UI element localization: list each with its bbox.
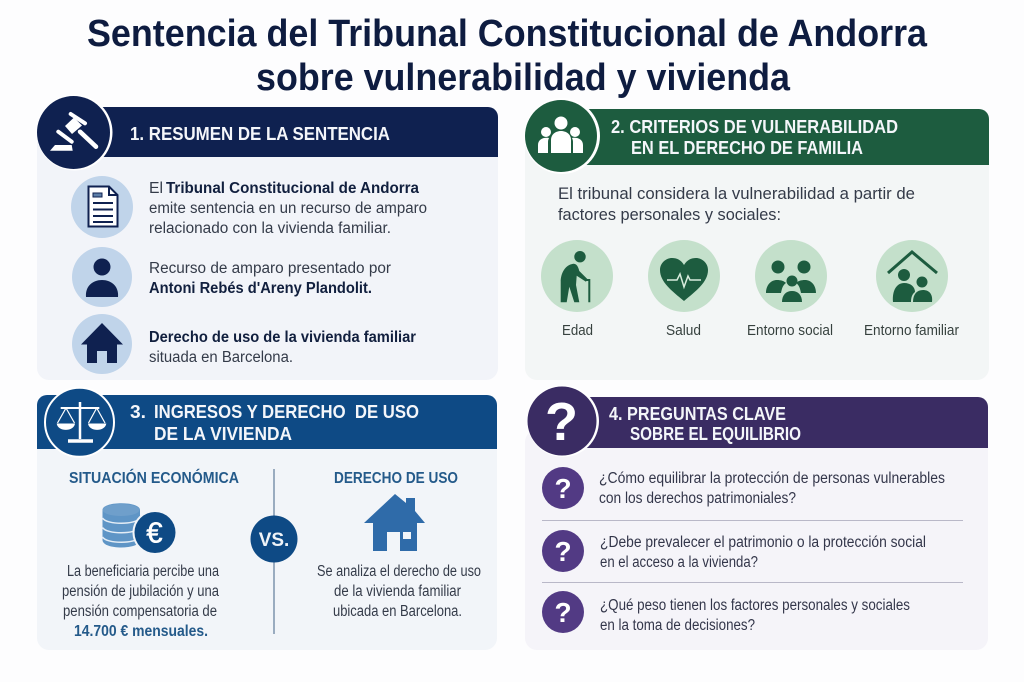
panel 4 heading xyxy=(609,404,801,444)
panel 2: criterios de vulnerabilidad xyxy=(524,98,989,380)
panel 4 heading: 4. PREGUNTAS CLAVE xyxy=(609,404,786,424)
panel 1: resumen de la sentencia xyxy=(36,94,498,380)
question 3: ¿Qué peso tienen los factores personales y sociales xyxy=(600,597,910,614)
criterion: edad xyxy=(541,240,613,339)
criterion: salud xyxy=(648,240,720,339)
text: derecho de uso: Derecho de uso de la vivienda familiar xyxy=(149,329,416,346)
panel 2 heading: EN EL DERECHO DE FAMILIA xyxy=(631,138,863,158)
left column heading: SITUACIÓN ECONÓMICA xyxy=(69,468,239,487)
question 3: ? xyxy=(554,597,572,628)
panel 4: preguntas clave xyxy=(525,385,988,650)
panel 2 family badge xyxy=(524,98,600,174)
question 1: con los derechos patrimoniales? xyxy=(599,490,796,507)
text: recurso de amparo: Antoni Rebés d'Areny Plandolit. xyxy=(149,280,372,297)
panel 3 header bar xyxy=(37,395,497,449)
text: derecho de uso xyxy=(149,329,416,366)
vs badge: VS. xyxy=(259,530,289,551)
question 3: en la toma de decisiones? xyxy=(600,617,755,634)
icon: person xyxy=(72,247,132,307)
question 2: ? xyxy=(554,536,572,567)
panel 3 heading: INGRESOS Y DERECHO DE USO xyxy=(154,402,419,422)
right column text: de la vivienda familiar xyxy=(334,583,461,600)
divider line xyxy=(273,469,275,634)
icon: document xyxy=(71,176,133,238)
text: derecho de uso: situada en Barcelona. xyxy=(149,349,293,366)
text: recurso de amparo: Recurso de amparo presentado por xyxy=(149,260,391,277)
panel 2 intro text: El tribunal considera la vulnerabilidad a partir de xyxy=(558,185,915,203)
left column text xyxy=(62,563,219,640)
left column text: 14.700 € mensuales. xyxy=(74,623,208,640)
panel 4 header bar xyxy=(585,397,988,448)
panel 4 question badge xyxy=(527,385,599,457)
criterion: entorno familiar xyxy=(864,240,959,339)
question 1 xyxy=(542,467,945,509)
panel 4 question badge: ? xyxy=(545,392,578,452)
left column text: La beneficiaria percibe una xyxy=(67,563,219,580)
left column text: pensión de jubilación y una xyxy=(62,583,219,600)
panel 3: ingresos y derecho de uso xyxy=(37,388,497,650)
panel 2 header bar xyxy=(585,109,989,165)
panel 1 heading: 1. RESUMEN DE LA SENTENCIA xyxy=(130,124,390,144)
text: tribunal: El xyxy=(149,180,163,197)
text: tribunal: emite sentencia en un recurso de amparo xyxy=(149,200,427,217)
left column text: pensión compensatoria de xyxy=(63,603,217,620)
text: tribunal: Tribunal Constitucional de Andorra xyxy=(166,180,419,197)
icon: house xyxy=(72,314,132,374)
title: sobre vulnerabilidad y vivienda xyxy=(256,57,791,99)
panel 3 heading: 3. xyxy=(130,402,146,422)
title xyxy=(87,13,928,99)
icon: coins and euro xyxy=(102,503,178,555)
icon: coins and euro: € xyxy=(146,518,163,550)
panel 2 heading: 2. CRITERIOS DE VULNERABILIDAD xyxy=(611,117,898,137)
question 1: ? xyxy=(554,473,572,504)
right column text: ubicada en Barcelona. xyxy=(333,603,462,620)
question 2 xyxy=(542,530,926,572)
panel 3 scales badge xyxy=(45,388,114,457)
text: tribunal: relacionado con la vivienda familiar. xyxy=(149,220,391,237)
criterion: entorno social: Entorno social xyxy=(747,322,833,339)
text: tribunal xyxy=(149,180,427,237)
question 3 xyxy=(542,591,910,634)
right column heading: DERECHO DE USO xyxy=(334,470,458,487)
question 2: en el acceso a la vivienda? xyxy=(600,554,758,571)
question 1: ¿Cómo equilibrar la protección de personas vulnerables xyxy=(599,470,945,487)
text: recurso de amparo xyxy=(149,260,391,297)
criterion: entorno familiar: Entorno familiar xyxy=(864,322,959,339)
panel 1 header bar xyxy=(100,107,498,157)
panel 2 heading xyxy=(611,117,898,158)
criterion: salud: Salud xyxy=(666,322,701,339)
criterion: entorno social xyxy=(747,240,833,339)
icon: house blue xyxy=(364,494,425,551)
panel 2 intro text: factores personales y sociales: xyxy=(558,206,781,224)
vs badge xyxy=(250,516,298,562)
panel 2 intro text xyxy=(558,185,915,224)
panel 4 heading: SOBRE EL EQUILIBRIO xyxy=(630,424,801,444)
title: Sentencia del Tribunal Constitucional de Andorra xyxy=(87,13,928,55)
panel 1 gavel badge xyxy=(36,94,112,170)
right column text: Se analiza el derecho de uso xyxy=(317,563,481,580)
panel 3 heading: DE LA VIVIENDA xyxy=(154,424,292,444)
right column text xyxy=(317,563,481,620)
question 2: ¿Debe prevalecer el patrimonio o la protección social xyxy=(600,534,926,551)
criterion: edad: Edad xyxy=(562,322,593,339)
panel 3 heading xyxy=(130,402,419,444)
